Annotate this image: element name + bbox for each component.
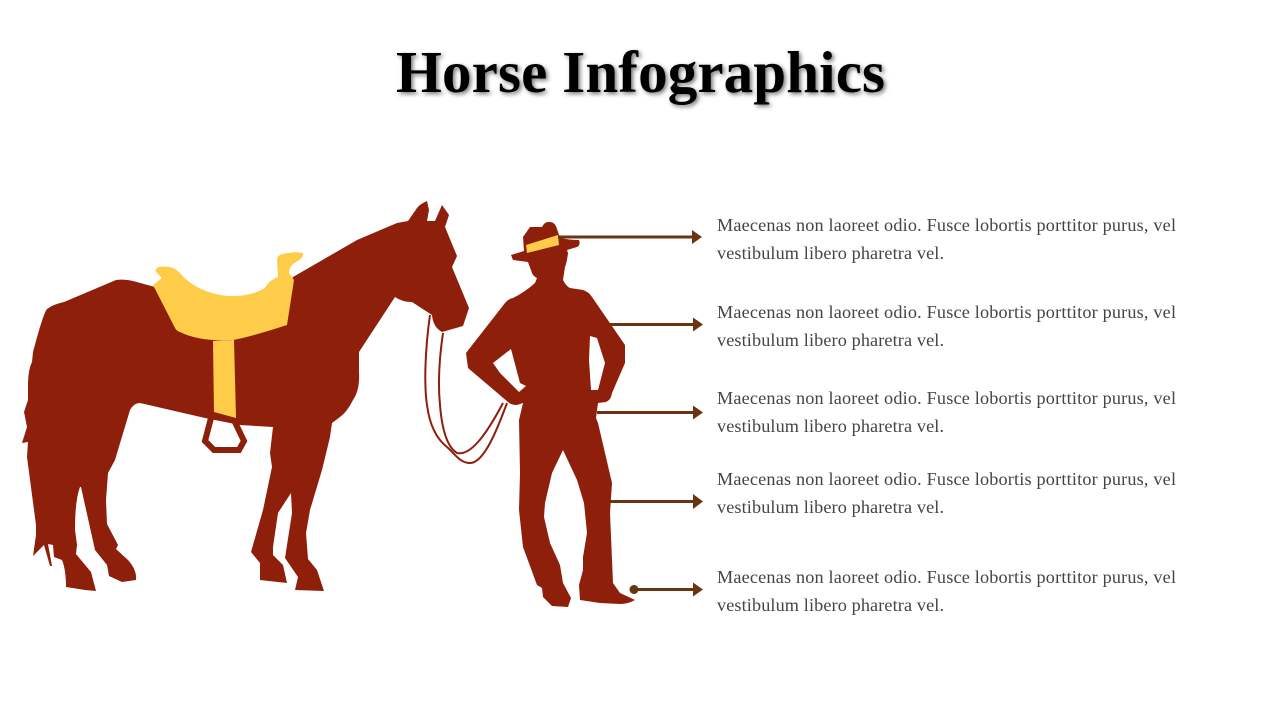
saddle strap [213, 340, 236, 418]
title: Horse Infographics [396, 39, 885, 105]
text block 1: vestibulum libero pharetra vel. [717, 243, 944, 263]
arrow 1 [558, 230, 702, 244]
arrow 3 [597, 406, 703, 420]
cowboy silhouette [466, 222, 635, 607]
arrow 5 [630, 582, 703, 596]
arrow 4 [610, 494, 703, 509]
horse silhouette [22, 201, 469, 591]
arrow 2 [610, 318, 703, 332]
text block 3: vestibulum libero pharetra vel. [717, 416, 944, 436]
horse illustration [22, 201, 469, 591]
text block 5: Maecenas non laoreet odio. Fusce lobortis porttitor purus, vel [717, 567, 1176, 587]
text block 2: vestibulum libero pharetra vel. [717, 330, 944, 350]
text block 3 [717, 388, 1176, 436]
text block 4: Maecenas non laoreet odio. Fusce lobortis porttitor purus, vel [717, 469, 1176, 489]
text block 4: vestibulum libero pharetra vel. [717, 497, 944, 517]
hat band [526, 235, 559, 253]
stirrup [205, 418, 244, 450]
lead ropes [425, 315, 507, 463]
text block 5 [717, 567, 1176, 615]
text block 3: Maecenas non laoreet odio. Fusce lobortis porttitor purus, vel [717, 388, 1176, 408]
text block 1: Maecenas non laoreet odio. Fusce lobortis porttitor purus, vel [717, 215, 1176, 235]
text block 2: Maecenas non laoreet odio. Fusce lobortis porttitor purus, vel [717, 302, 1176, 322]
text block 5: vestibulum libero pharetra vel. [717, 595, 944, 615]
text block 4 [717, 469, 1176, 517]
text block 1 [717, 215, 1176, 263]
saddle [153, 252, 303, 340]
text block 2 [717, 302, 1176, 350]
